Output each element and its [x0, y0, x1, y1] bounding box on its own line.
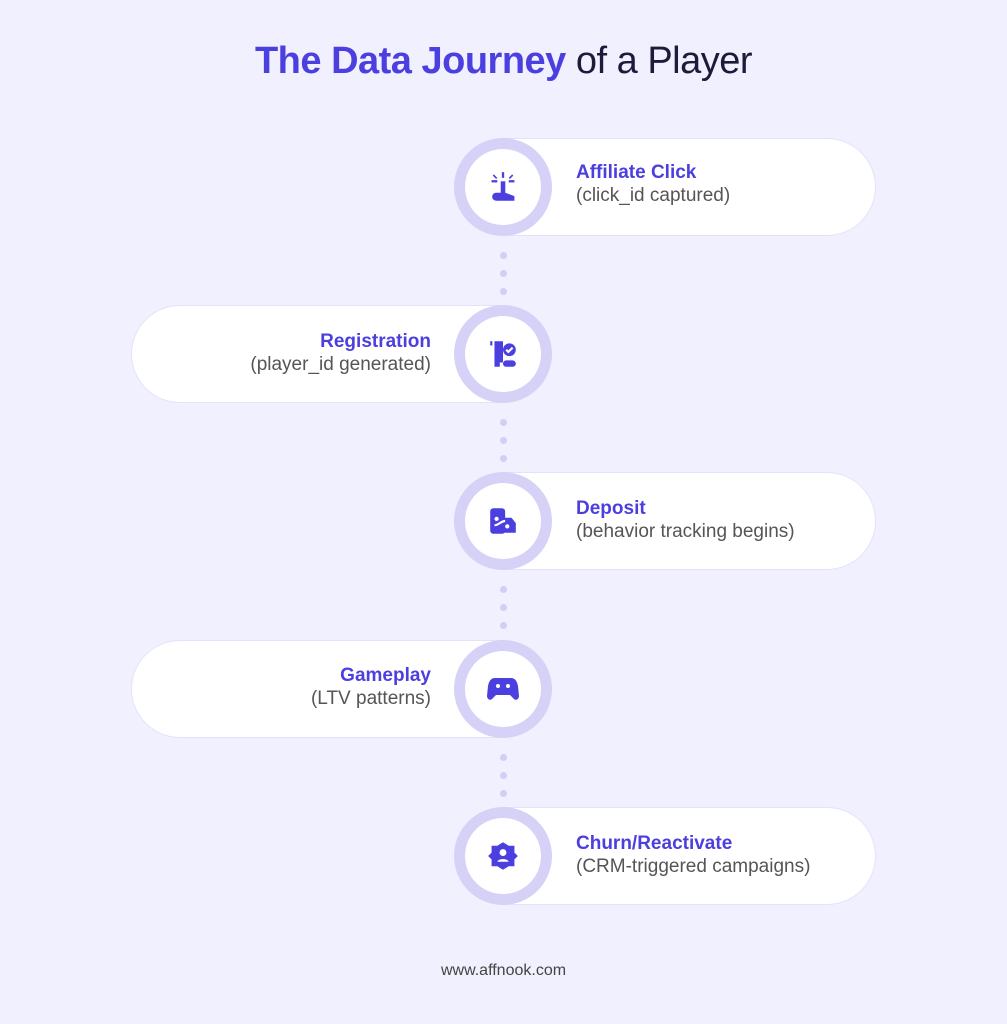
text: churn: Churn/Reactivate: [576, 833, 732, 854]
text: churn: (CRM-triggered campaigns): [576, 856, 810, 877]
pill: registration: [131, 305, 503, 403]
pill: affiliate click: [503, 138, 876, 236]
text: deposit: [576, 498, 795, 542]
pill: deposit: [503, 472, 876, 570]
connector dots: [500, 252, 507, 797]
title: The Data Journey of a Player: [255, 40, 752, 82]
text: affiliate click: (click_id captured): [576, 185, 730, 206]
text: deposit: (behavior tracking begins): [576, 521, 795, 542]
text: affiliate click: [576, 162, 730, 206]
icon: deposit: [454, 472, 552, 570]
text: gameplay: Gameplay: [340, 665, 431, 686]
text: affiliate click: Affiliate Click: [576, 162, 696, 183]
icon: affiliate click: [454, 138, 552, 236]
text: gameplay: (LTV patterns): [311, 688, 431, 709]
pill: churn: [503, 807, 876, 905]
text: registration: (player_id generated): [250, 354, 431, 375]
footer: www.affnook.com: [441, 962, 566, 979]
text: gameplay: [311, 665, 431, 709]
text: deposit: Deposit: [576, 498, 646, 519]
text: registration: [250, 331, 431, 375]
text: churn: [576, 833, 810, 877]
icon: gameplay: [454, 640, 552, 738]
pill: gameplay: [131, 640, 503, 738]
icon: registration: [454, 305, 552, 403]
text: registration: Registration: [320, 331, 431, 352]
icon: churn: [454, 807, 552, 905]
